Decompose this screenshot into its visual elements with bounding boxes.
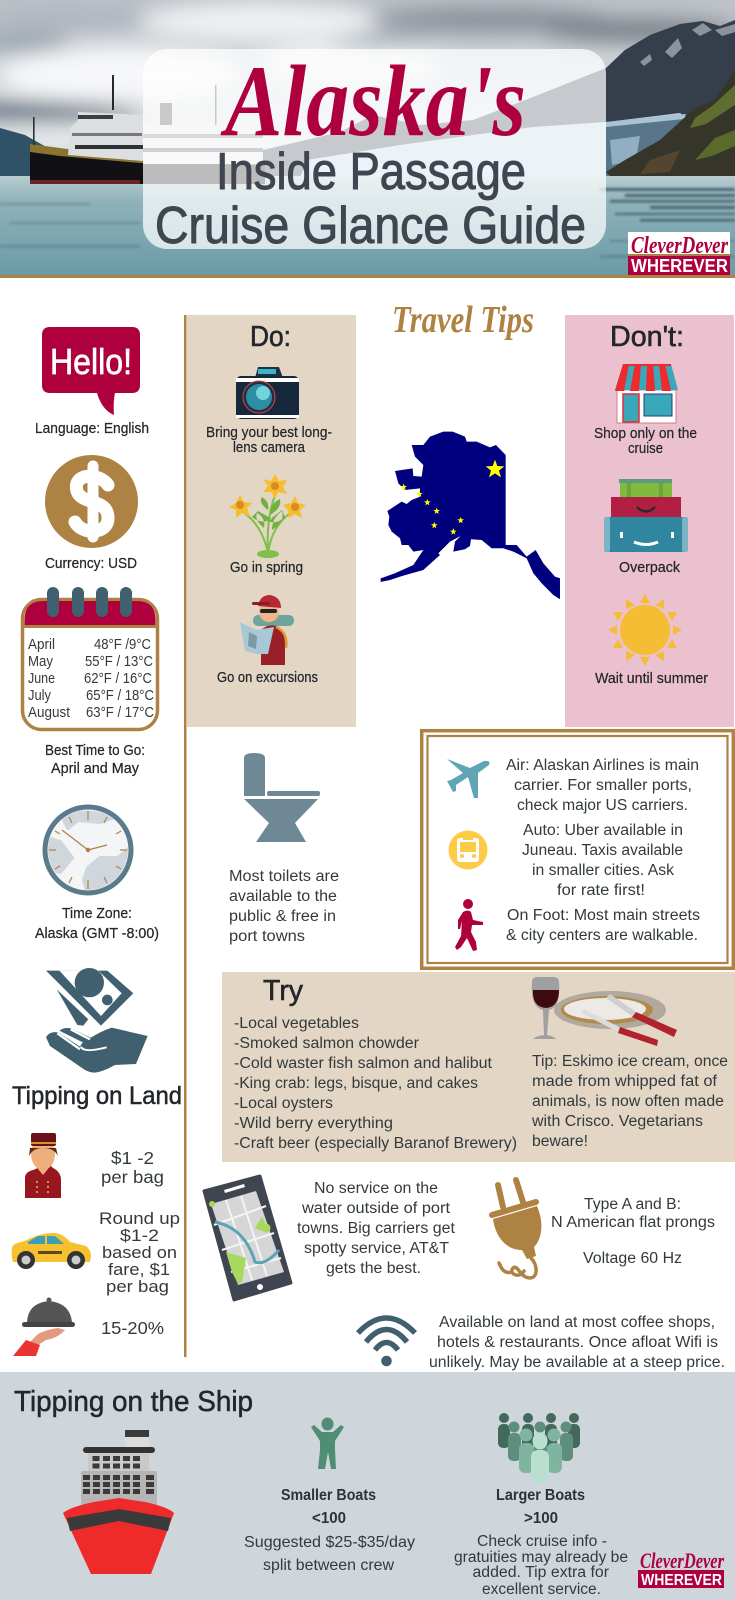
- label: time zone: Time Zone:: [62, 905, 132, 922]
- text: taxi tip: [99, 1209, 180, 1296]
- text: wifi: Available on land at most coffee shops,: [439, 1314, 715, 1331]
- text: larger boats: excellent service.: [482, 1581, 601, 1598]
- double gold frame: [422, 731, 733, 968]
- weather calendar: April: [28, 636, 55, 653]
- text: cell service: water outside of port: [301, 1200, 451, 1217]
- icon: camera: [236, 367, 299, 419]
- text: auto: in smaller cities. Ask: [532, 862, 674, 879]
- heading: don't: Don't:: [610, 321, 684, 353]
- icon: hello speech bubble: [42, 327, 140, 415]
- text: air: check major US carriers.: [517, 797, 688, 814]
- text: taxi tip: based on: [102, 1243, 177, 1262]
- weather calendar: [22, 587, 158, 730]
- column: essentials: [12, 327, 182, 1356]
- label: best time to go: [45, 742, 145, 777]
- food list: -Local vegetables: [234, 1015, 359, 1032]
- panel: try: [222, 972, 735, 1162]
- text: smaller boats: [244, 1487, 415, 1574]
- text: toilets: Most toilets are: [229, 868, 339, 885]
- icon: hiker with map: [240, 595, 294, 665]
- weather calendar: 63°F / 17°C: [86, 704, 154, 721]
- weather calendar: May: [28, 653, 53, 670]
- panel: don't: [565, 315, 734, 727]
- logo: CleverDever Wherever top: WHEREVER: [631, 256, 728, 276]
- vertical gold divider: [184, 315, 186, 1357]
- food list: -Wild berry everything: [234, 1115, 393, 1132]
- text: larger boats: Larger Boats: [496, 1487, 585, 1504]
- text: plug type: [551, 1196, 715, 1267]
- text: shop only: Shop only on the: [594, 425, 697, 442]
- text: taxi tip: Round up: [99, 1209, 180, 1228]
- text: cell service: No service on the: [314, 1180, 438, 1197]
- text: bag tip: per bag: [101, 1167, 164, 1187]
- label: time zone: Alaska (GMT -8:00): [35, 925, 159, 942]
- text: eskimo tip: made from whipped fat of: [532, 1073, 718, 1090]
- icon: money over open hand: [46, 968, 148, 1073]
- text: auto: for rate first!: [557, 882, 645, 899]
- icon: wifi: [358, 1318, 415, 1366]
- heading: try: Try: [263, 975, 303, 1007]
- text: taxi tip: $1-2: [120, 1226, 159, 1245]
- label: best time to go: April and May: [51, 760, 139, 777]
- translucent title panel: [143, 49, 606, 249]
- title: Alaska's: Alaska's: [220, 45, 526, 158]
- text: shop only: [594, 425, 697, 457]
- heading: tipping on the ship: Tipping on the Ship: [14, 1386, 253, 1418]
- text: auto: Auto: Uber available in: [523, 822, 683, 839]
- icon: plane: [447, 759, 489, 798]
- text: auto: Juneau. Taxis available: [522, 842, 683, 859]
- glacier: [300, 113, 690, 178]
- icon: shop: [615, 364, 678, 423]
- text: toilets: port towns: [229, 928, 305, 945]
- text: taxi tip: fare, $1: [108, 1260, 170, 1279]
- text: larger boats: gratuities may already be: [454, 1549, 628, 1566]
- title: Cruise Glance Guide: Cruise Glance Guide: [155, 197, 586, 255]
- icon: world clock: [45, 807, 132, 894]
- food list: -Cold waster fish salmon and halibut: [234, 1055, 493, 1072]
- text: air: carrier. For smaller ports,: [514, 777, 692, 794]
- icon: stacked luggage: [604, 479, 688, 552]
- weather calendar: 55°F / 13°C: [85, 653, 153, 670]
- text: wifi: [429, 1314, 725, 1371]
- icon: spring daffodils: [229, 474, 306, 558]
- label: best time to go: Best Time to Go:: [45, 742, 145, 759]
- panel: do: [187, 315, 356, 727]
- text: larger boats: added. Tip extra for: [472, 1564, 609, 1581]
- panel: transport: [422, 731, 733, 968]
- logo: CleverDever Wherever bottom: [638, 1548, 724, 1589]
- text: cell service: spotty service, AT&T: [304, 1240, 450, 1257]
- icon: walking person: [455, 899, 483, 951]
- icon: bus: [448, 830, 488, 870]
- food list: [234, 1015, 517, 1152]
- text: eskimo tip: beware!: [532, 1133, 588, 1150]
- text: eskimo tip: Tip: Eskimo ice cream, once: [532, 1053, 728, 1070]
- weather calendar: August: [28, 704, 71, 721]
- text: on foot: [506, 907, 700, 944]
- text: shop only: cruise: [628, 440, 663, 457]
- food list: -King crab: legs, bisque, and cakes: [234, 1075, 478, 1092]
- text: toilets: [229, 868, 339, 945]
- text: on foot: On Foot: Most main streets: [507, 907, 700, 924]
- text: plug type: N American flat prongs: [551, 1214, 715, 1231]
- food list: -Local oysters: [234, 1095, 333, 1112]
- text: overpack: Overpack: [619, 559, 680, 576]
- icon: single crew member: [311, 1418, 344, 1469]
- label: language: Language: English: [35, 420, 149, 437]
- text: larger boats: [454, 1487, 628, 1598]
- title: Inside Passage: Inside Passage: [216, 143, 526, 201]
- logo: CleverDever Wherever bottom: WHEREVER: [641, 1572, 722, 1589]
- text: larger boats: >100: [524, 1510, 558, 1527]
- text: cell service: gets the best.: [326, 1260, 421, 1277]
- text: restaurant tip: 15-20%: [101, 1318, 164, 1338]
- rear mountain: [263, 20, 735, 178]
- text: taxi tip: per bag: [106, 1277, 169, 1296]
- near cliff: [606, 70, 735, 180]
- text: go in spring: Go in spring: [230, 559, 303, 576]
- weather calendar: July: [28, 687, 51, 704]
- logo: CleverDever Wherever top: [628, 232, 730, 276]
- icon: cruise ship: [63, 1430, 174, 1574]
- icon: waiter hand with cloche: [13, 1298, 75, 1356]
- text: wifi: hotels & restaurants. Once afloat Wifi is: [437, 1334, 718, 1351]
- gold rule under banner: [0, 275, 735, 278]
- icon: smartphone map: [204, 1176, 291, 1300]
- icon: hello speech bubble: Hello!: [50, 341, 132, 382]
- icon: sun: [608, 594, 682, 666]
- icon: toilet: [244, 753, 320, 842]
- weather calendar: 62°F / 16°C: [84, 670, 152, 687]
- text: bag tip: $1 -2: [111, 1148, 154, 1168]
- text: eskimo tip: animals, is now often made: [532, 1093, 724, 1110]
- heading: travel tips: Travel Tips: [392, 299, 534, 341]
- text: smaller boats: <100: [312, 1510, 346, 1527]
- text: larger boats: Check cruise info -: [477, 1533, 607, 1550]
- hero banner: [0, 0, 735, 278]
- text: bring camera: [206, 424, 332, 456]
- icon: yellow taxi: [12, 1233, 91, 1269]
- icon: dollar coin: [45, 455, 138, 548]
- panel: tipping on the ship: [0, 1372, 735, 1600]
- text: air: [506, 757, 699, 814]
- map: Alaska flag: [381, 432, 560, 599]
- text: eskimo tip: with Crisco. Vegetarians: [531, 1113, 703, 1130]
- icon: power plug: [492, 1180, 541, 1278]
- text: air: Air: Alaskan Airlines is main: [506, 757, 699, 774]
- distant left hills: [0, 128, 44, 176]
- weather calendar: June: [28, 670, 55, 687]
- text: cell service: towns. Big carriers get: [297, 1220, 456, 1237]
- heading: tipping on land: Tipping on Land: [12, 1082, 182, 1110]
- heading: do: Do:: [250, 321, 291, 353]
- text: smaller boats: Suggested $25-$35/day: [244, 1534, 415, 1551]
- icon: wine and plate: [532, 977, 677, 1046]
- text: cell service: [297, 1180, 456, 1277]
- ship: [30, 75, 265, 184]
- text: go on excursions: Go on excursions: [217, 669, 318, 686]
- label: currency: Currency: USD: [45, 555, 137, 572]
- text: smaller boats: split between crew: [263, 1557, 394, 1574]
- icon: bellhop: [25, 1133, 61, 1198]
- sea: [0, 176, 735, 276]
- text: eskimo tip: [531, 1053, 728, 1150]
- text: smaller boats: Smaller Boats: [281, 1487, 376, 1504]
- text: plug type: Voltage 60 Hz: [583, 1250, 682, 1267]
- hero photo: ship, glacier and mountains: [0, 0, 735, 276]
- text: wifi: unlikely. May be available at a steep price.: [429, 1354, 725, 1371]
- label: time zone: [35, 905, 159, 942]
- text: bring camera: Bring your best long-: [206, 424, 332, 441]
- weather calendar: 65°F / 18°C: [86, 687, 154, 704]
- text: toilets: available to the: [229, 888, 337, 905]
- weather calendar: 48°F /9°C: [94, 636, 151, 653]
- text: bag tip: [101, 1148, 164, 1187]
- text: bring camera: lens camera: [233, 439, 306, 456]
- text: toilets: public & free in: [229, 908, 336, 925]
- text: on foot: & city centers are walkable.: [506, 927, 698, 944]
- food list: -Smoked salmon chowder: [234, 1035, 419, 1052]
- text: plug type: Type A and B:: [584, 1196, 681, 1213]
- text: wait until summer: Wait until summer: [595, 670, 708, 687]
- food list: -Craft beer (especially Baranof Brewery): [234, 1135, 517, 1152]
- icon: crew group: [498, 1413, 580, 1483]
- text: auto: [522, 822, 683, 899]
